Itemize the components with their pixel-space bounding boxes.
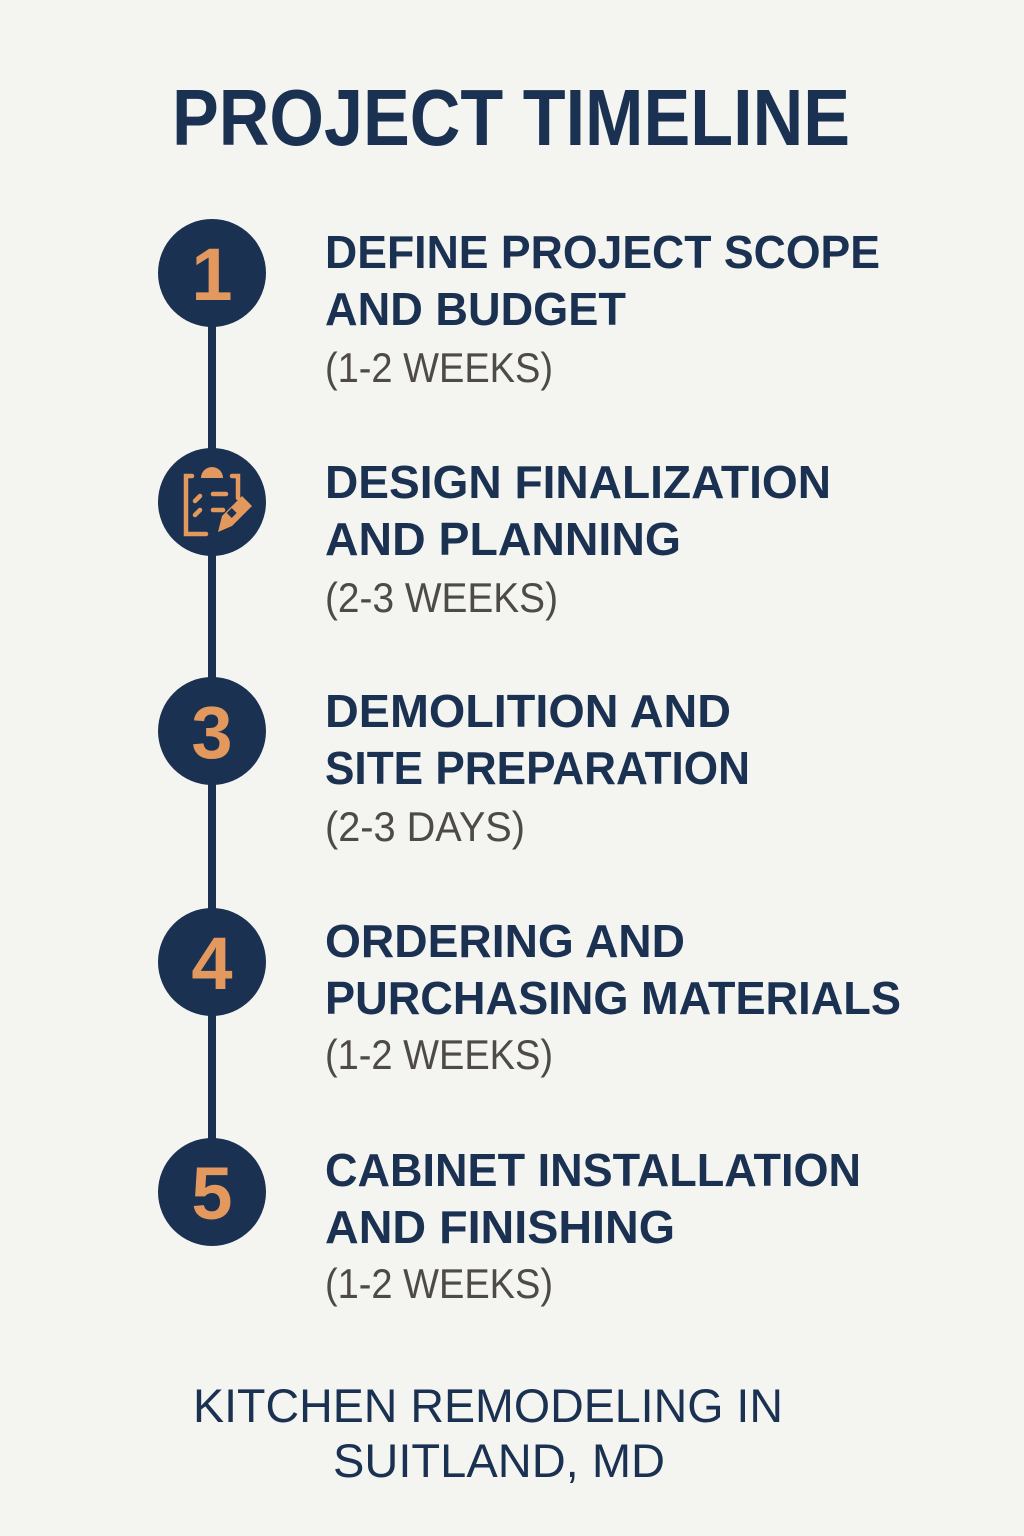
step 4 text: ORDERING AND — [325, 915, 685, 967]
icon: number 3: 3 — [191, 691, 233, 774]
step 5 — [158, 1138, 861, 1307]
step 3 text — [325, 685, 750, 850]
title: PROJECT TIMELINE — [172, 73, 850, 162]
step 2 — [158, 448, 831, 621]
icon: number 4: 4 — [191, 922, 233, 1005]
step 4 text: PURCHASING MATERIALS — [325, 972, 901, 1024]
step 2 text: DESIGN FINALIZATION — [325, 456, 831, 508]
step 1 text: (1-2 WEEKS) — [325, 344, 553, 391]
step 1 text: AND BUDGET — [325, 283, 626, 335]
icon: clipboard with pencil — [158, 448, 266, 556]
icon: number 3 — [158, 677, 266, 785]
step 3 — [158, 677, 750, 850]
step 4 — [158, 908, 901, 1078]
step 4 text — [325, 915, 901, 1078]
step 3 text: DEMOLITION AND — [325, 685, 731, 737]
footer: SUITLAND, MD — [333, 1434, 665, 1487]
step 5 text: (1-2 WEEKS) — [325, 1260, 553, 1307]
icon: number 1: 1 — [191, 233, 233, 316]
step 2 text: (2-3 WEEKS) — [325, 574, 558, 621]
icon: number 4 — [158, 908, 266, 1016]
icon: number 1 — [158, 219, 266, 327]
step 5 text: AND FINISHING — [325, 1201, 675, 1253]
step 3 text: SITE PREPARATION — [325, 742, 750, 794]
step 5 text: CABINET INSTALLATION — [325, 1144, 861, 1196]
footer: KITCHEN REMODELING IN — [193, 1379, 783, 1432]
step 1 text — [325, 226, 880, 391]
step 5 text — [325, 1144, 861, 1307]
step 2 text — [325, 456, 831, 621]
step 4 text: (1-2 WEEKS) — [325, 1031, 553, 1078]
step 2 text: AND PLANNING — [325, 513, 681, 565]
footer — [193, 1379, 783, 1487]
timeline line — [208, 273, 216, 1193]
step 1 text: DEFINE PROJECT SCOPE — [325, 226, 880, 278]
step 3 text: (2-3 DAYS) — [325, 803, 525, 850]
icon: number 5 — [158, 1138, 266, 1246]
icon: number 5: 5 — [191, 1152, 233, 1235]
step 1 — [158, 219, 880, 391]
